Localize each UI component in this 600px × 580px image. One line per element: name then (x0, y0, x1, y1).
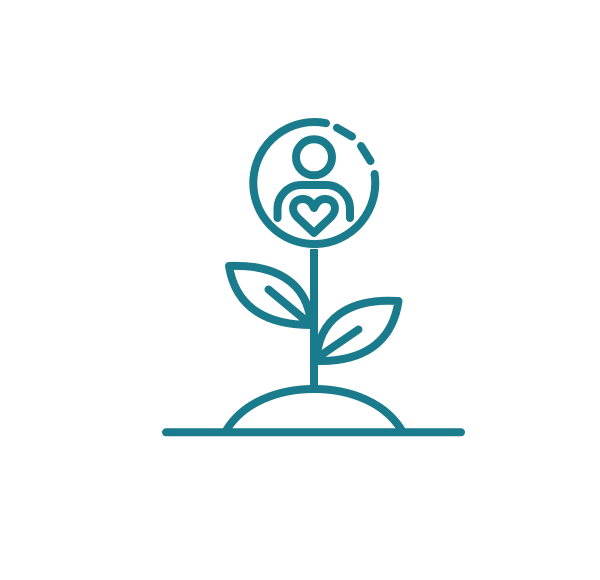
plant stem (310, 249, 318, 390)
icon: person (278, 139, 350, 218)
soil mound (226, 389, 402, 430)
icon: heart (293, 199, 335, 233)
right leaf (316, 301, 398, 361)
left leaf (229, 266, 311, 325)
flower circle: partly dashed ring (253, 122, 375, 244)
ground line (166, 428, 461, 436)
